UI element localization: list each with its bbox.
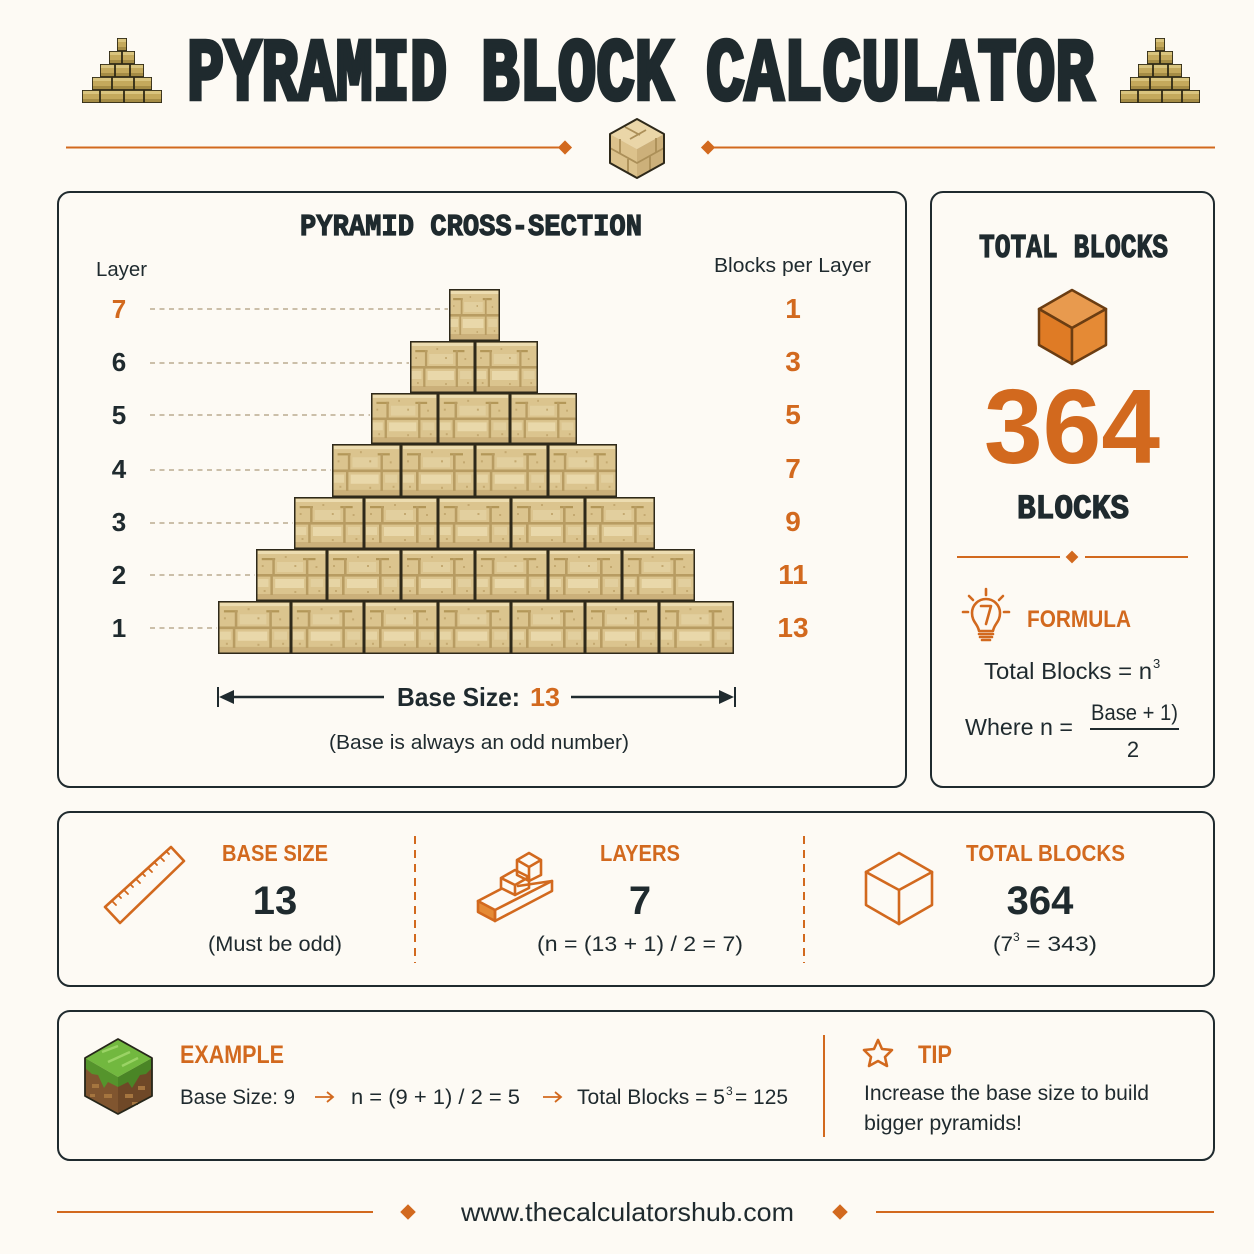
blocks per layer numbers: 11 — [778, 559, 808, 590]
stat: base size: (Must be odd) — [208, 933, 342, 956]
panel: pyramid cross-section — [58, 192, 906, 787]
stat: base size — [208, 840, 342, 956]
stat: layers: LAYERS — [600, 840, 680, 866]
stat: total blocks: 364 — [1007, 879, 1074, 923]
fraction: Base + 1) — [1091, 700, 1178, 725]
example calculation: Total Blocks = 5 — [577, 1086, 725, 1109]
example calculation: Base Size: 9 — [180, 1086, 295, 1109]
stat: total blocks: (7 — [993, 933, 1013, 956]
icon: orange cube — [1039, 290, 1106, 364]
icon: stacked layers — [478, 853, 552, 921]
dashed separators — [415, 836, 804, 963]
pyramid blocks — [218, 289, 734, 654]
example calculation — [180, 1084, 788, 1109]
layer numbers: 5 — [112, 400, 126, 430]
stat: total blocks: 3 — [1013, 930, 1020, 944]
title — [187, 27, 1094, 126]
blocks per layer numbers: 13 — [777, 612, 809, 643]
blocks per layer numbers — [777, 293, 809, 643]
base note: (Base is always an odd number) — [329, 732, 629, 754]
footer — [57, 1197, 1214, 1227]
fraction: 2 — [1127, 737, 1139, 762]
example heading: EXAMPLE — [180, 1041, 284, 1069]
icon: ruler — [105, 847, 184, 923]
icon: small pyramid left — [82, 38, 162, 103]
heading: cross-section: PYRAMID CROSS-SECTION — [300, 210, 642, 245]
layer numbers: 4 — [112, 454, 127, 484]
base size label: Base Size: — [397, 682, 520, 712]
label: blocks per layer column: Blocks per Layer — [714, 255, 871, 277]
where n: Where n = — [965, 714, 1073, 740]
formula line: Total Blocks = n — [984, 658, 1152, 684]
stat: total blocks — [966, 840, 1125, 956]
icon: light bulb — [963, 589, 1009, 640]
label: layer column: Layer — [96, 259, 147, 281]
tip text — [864, 1082, 1149, 1135]
fraction — [1090, 700, 1179, 762]
stat: total blocks: = 343) — [1026, 933, 1097, 956]
formula exponent: 3 — [1153, 656, 1160, 671]
formula label: FORMULA — [1027, 606, 1131, 633]
icon: small pyramid right — [1120, 38, 1200, 103]
layer numbers: 7 — [112, 294, 126, 324]
icon: sandstone cube — [610, 119, 664, 178]
blocks per layer numbers: 9 — [785, 506, 801, 537]
base size label: 13 — [530, 682, 560, 712]
tip text: bigger pyramids! — [864, 1112, 1022, 1135]
vertical divider — [823, 1035, 825, 1137]
panel: total blocks — [931, 192, 1214, 787]
stat: total blocks: TOTAL BLOCKS — [966, 840, 1125, 866]
stat: base size: 13 — [253, 879, 297, 923]
icon: star — [864, 1040, 892, 1066]
blocks per layer numbers: 5 — [785, 399, 801, 430]
panel: stats — [58, 812, 1214, 986]
blocks per layer numbers: 1 — [785, 293, 801, 324]
layer numbers: 6 — [112, 347, 126, 377]
title: PYRAMID — [187, 27, 447, 126]
dotted leader lines — [150, 309, 448, 628]
example calculation: 3 — [726, 1084, 733, 1098]
example calculation: n = (9 + 1) / 2 = 5 — [351, 1086, 520, 1109]
icon: grass block — [85, 1039, 152, 1114]
layer numbers: 3 — [112, 507, 126, 537]
layer numbers: 1 — [112, 613, 126, 643]
stat: layers: 7 — [629, 879, 651, 923]
layer numbers — [112, 294, 127, 643]
panel: example and tip — [58, 1011, 1214, 1160]
layer numbers: 2 — [112, 560, 126, 590]
tip text: Increase the base size to build — [864, 1082, 1149, 1105]
big number: 364 — [984, 368, 1160, 486]
website url: www.thecalculatorshub.com — [460, 1197, 794, 1227]
stat: layers — [537, 840, 743, 956]
blocks per layer numbers: 3 — [785, 346, 801, 377]
divider — [957, 551, 1188, 563]
example calculation: = 125 — [735, 1086, 788, 1109]
title: BLOCK — [481, 27, 673, 126]
heading: total blocks: TOTAL BLOCKS — [979, 230, 1168, 267]
blocks per layer numbers: 7 — [785, 453, 801, 484]
header divider — [66, 140, 1215, 155]
icon: cube outline — [866, 853, 932, 924]
stat: base size: BASE SIZE — [222, 840, 328, 866]
base size dimension arrow — [218, 687, 735, 707]
title: CALCULATOR — [706, 27, 1094, 126]
tip heading: TIP — [918, 1041, 952, 1069]
stat: layers: (n = (13 + 1) / 2 = 7) — [537, 933, 743, 956]
blocks label: BLOCKS — [1017, 491, 1129, 529]
